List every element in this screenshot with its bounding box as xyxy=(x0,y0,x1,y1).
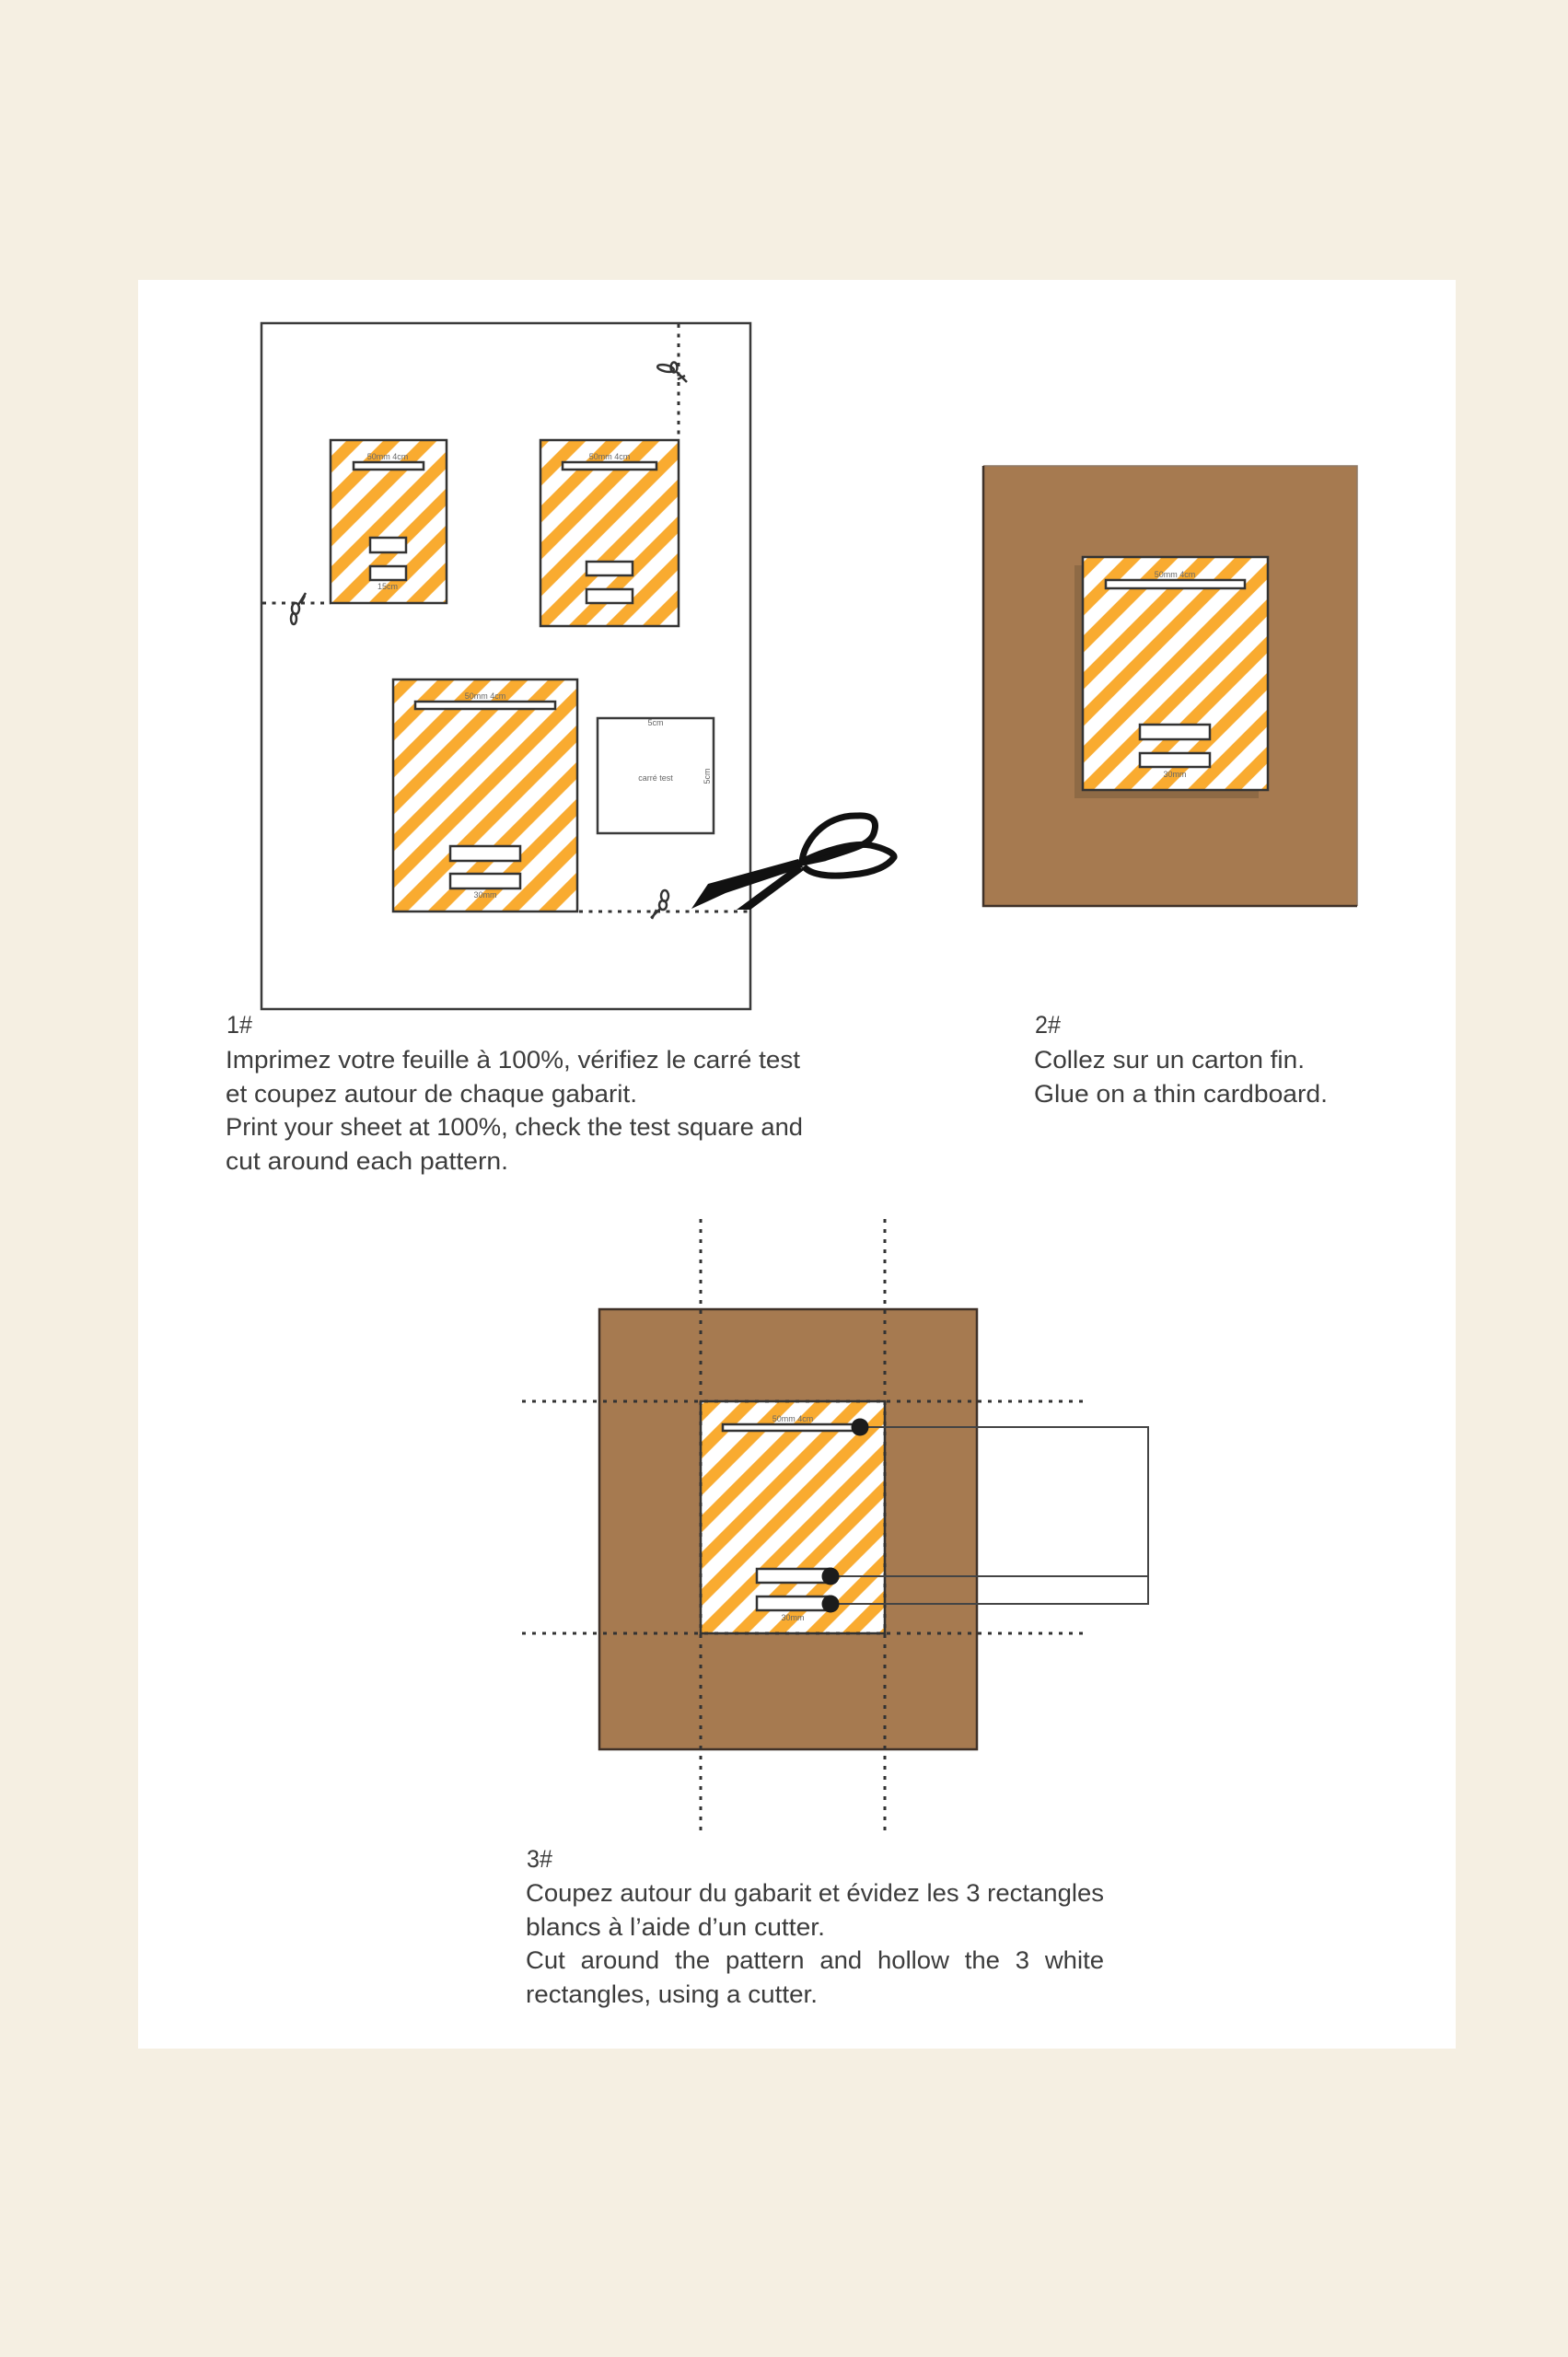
white sheet panel xyxy=(138,280,1456,2049)
text block: step 2: Glue on a thin cardboard. xyxy=(1034,1080,1328,1108)
large pattern xyxy=(393,679,577,911)
icon: tiny scissors left xyxy=(291,593,306,624)
large pattern: 50mm 4cm xyxy=(465,691,505,701)
pattern shadow xyxy=(1074,565,1259,798)
large pattern: 30mm xyxy=(473,890,497,900)
small pattern: 50mm 4cm xyxy=(367,452,408,461)
panel: step 2 pattern on cardboard xyxy=(983,466,1357,906)
glued pattern xyxy=(1083,557,1268,790)
test square xyxy=(598,718,714,833)
medium pattern xyxy=(540,440,679,626)
panel: step 3 cutting diagram xyxy=(522,1219,1148,1832)
text block: step 1: 1# xyxy=(226,1011,252,1039)
text block: step 1: Print your sheet at 100%, check the test square and xyxy=(226,1113,803,1141)
text block: step 2: Collez sur un carton fin. xyxy=(1034,1046,1305,1074)
small pattern xyxy=(331,440,447,603)
test square: carré test xyxy=(638,773,673,783)
pattern xyxy=(701,1401,885,1633)
test square: 5cm xyxy=(703,768,712,784)
text block: step 1 xyxy=(226,1011,803,1175)
text block: step 3: Coupez autour du gabarit et évidez les 3 rectangles xyxy=(526,1879,1104,1907)
dotted cut lines xyxy=(262,324,750,911)
small pattern: 15cm xyxy=(377,582,398,591)
text block: step 2: 2# xyxy=(1035,1011,1061,1039)
text block: step 3: Cut around the pattern and hollow the 3 white xyxy=(526,1946,1104,1974)
icon: large scissors xyxy=(691,816,894,910)
text block: step 3: 3# xyxy=(527,1845,552,1873)
icon: tiny scissors top xyxy=(656,363,687,382)
text block: step 1: cut around each pattern. xyxy=(226,1147,508,1175)
hollow-out markers xyxy=(821,1418,869,1613)
text block: step 1: et coupez autour de chaque gabarit. xyxy=(226,1080,637,1108)
panel: step 1 printed sheet xyxy=(261,323,894,1009)
text block: step 3: rectangles, using a cutter. xyxy=(526,1980,818,2008)
sheet outline xyxy=(261,323,750,1009)
text block: step 1: Imprimez votre feuille à 100%, vérifiez le carré test xyxy=(226,1046,801,1074)
icon: tiny scissors bottom xyxy=(651,890,668,919)
medium pattern: 50mm 4cm xyxy=(589,452,630,461)
text block: step 3: blancs à l’aide d’un cutter. xyxy=(526,1913,825,1941)
glued pattern: 50mm 4cm xyxy=(1155,570,1195,579)
text block: step 3 xyxy=(526,1845,1104,2008)
test square: 5cm xyxy=(647,718,664,727)
connector lines xyxy=(830,1427,1148,1604)
dotted cut guides xyxy=(522,1219,1087,1832)
cardboard xyxy=(983,466,1357,906)
text block: step 2 xyxy=(1034,1011,1328,1108)
pattern: 50mm 4cm xyxy=(772,1414,813,1423)
pattern: 30mm xyxy=(781,1613,805,1622)
cardboard xyxy=(599,1309,977,1749)
glued pattern: 30mm xyxy=(1163,770,1187,779)
